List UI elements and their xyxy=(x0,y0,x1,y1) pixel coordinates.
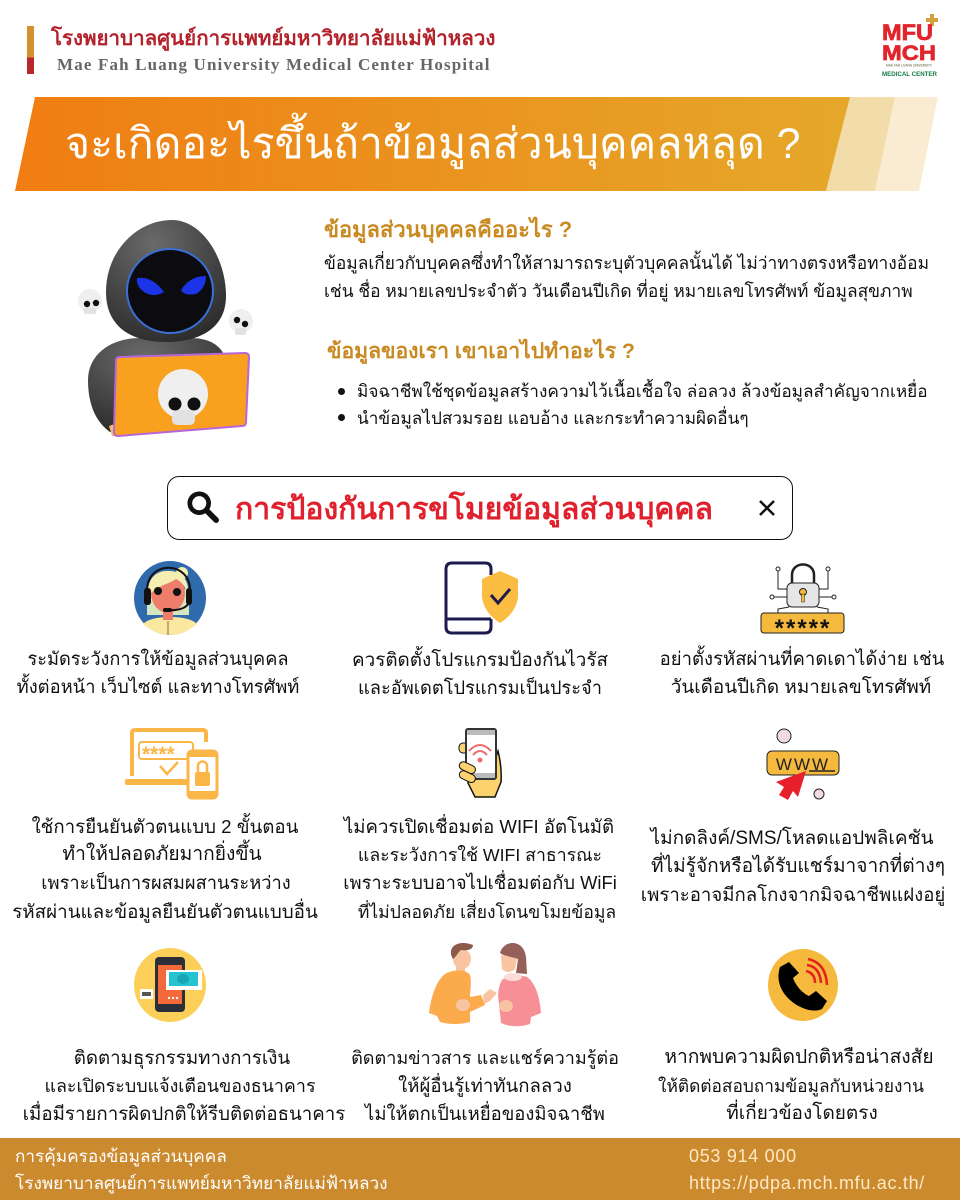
search bar xyxy=(167,476,793,540)
tip 8 text: ติดตามข่าวสาร และแชร์ความรู้ต่อ xyxy=(351,1048,619,1068)
tip 7 text xyxy=(23,1047,345,1124)
bullet list: นำข้อมูลไปสวมรอย แอบอ้าง และกระทำความผิดอื่นๆ xyxy=(357,408,749,428)
tip 8 text xyxy=(351,1048,619,1124)
search heading: การป้องกันการขโมยข้อมูลส่วนบุคคล xyxy=(235,493,713,526)
header accent bar xyxy=(27,26,34,74)
tip 1 text: ทั้งต่อหน้า เว็บไซต์ และทางโทรศัพท์ xyxy=(17,676,299,697)
tip 4 text: ทำให้ปลอดภัยมากยิ่งขึ้น xyxy=(62,844,262,865)
tip 3 text: อย่าตั้งรหัสผ่านที่คาดเดาได้ง่าย เช่น xyxy=(660,648,944,669)
tip 3 text xyxy=(660,645,944,697)
tip 9 text: หากพบความผิดปกติหรือน่าสงสัย xyxy=(664,1047,934,1068)
tip 6 icon: www click: WWW xyxy=(776,755,830,774)
tip 4 text: เพราะเป็นการผสมผสานระหว่าง xyxy=(41,872,291,893)
heading: what is personal data: ข้อมูลส่วนบุคคลคืออะไร ? xyxy=(324,217,572,242)
definition text: เช่น ชื่อ หมายเลขประจำตัว วันเดือนปีเกิด ที่อยู่ หมายเลขโทรศัพท์ ข้อมูลสุขภาพ xyxy=(324,281,913,301)
tip 5 icon: hand with phone wifi xyxy=(458,728,502,798)
tip 8 text: ไม่ให้ตกเป็นเหยื่อของมิจฉาชีพ xyxy=(365,1103,605,1124)
tip 7 text: ติดตามธุรกรรมทางการเงิน xyxy=(74,1047,290,1068)
tip 4 text: รหัสผ่านและข้อมูลยืนยันตัวตนแบบอื่น xyxy=(12,901,318,922)
hospital name English: Mae Fah Luang University Medical Center Hospital xyxy=(57,55,491,74)
definition text xyxy=(324,250,929,302)
bullet list: มิจฉาชีพใช้ชุดข้อมูลสร้างความไว้เนื้อเชื้อใจ ล่อลวง ล้วงข้อมูลสำคัญจากเหยื่อ xyxy=(357,381,928,401)
logo: MCH xyxy=(882,42,936,65)
tip 2 text: และอัพเดตโปรแกรมเป็นประจำ xyxy=(358,677,602,698)
tip 2 text: ควรติดตั้งโปรแกรมป้องกันไวรัส xyxy=(352,649,608,670)
tip 4 text xyxy=(12,813,318,923)
tip 2 text xyxy=(352,646,608,698)
tip 8 icon: two people talking xyxy=(429,943,541,1026)
hacker illustration xyxy=(78,220,253,437)
tip 1 text: ระมัดระวังการให้ข้อมูลส่วนบุคคล xyxy=(27,649,289,669)
tip 5 text: เพราะระบบอาจไปเชื่อมต่อกับ WiFi xyxy=(343,872,617,893)
tip 5 text: และระวังการใช้ WIFI สาธารณะ xyxy=(358,845,602,865)
bullet list xyxy=(338,378,928,428)
tip 3 icon: padlock and password xyxy=(760,563,844,642)
tip 9 text: ที่เกี่ยวข้องโดยตรง xyxy=(726,1103,878,1124)
footer organisation text xyxy=(15,1146,388,1194)
logo: MEDICAL CENTER xyxy=(882,71,937,78)
tip 7 text: และเปิดระบบแจ้งเตือนของธนาคาร xyxy=(44,1076,316,1096)
tip 6 text: เพราะอาจมีกลโกงจากมิจฉาชีพแฝงอยู่ xyxy=(641,884,945,905)
hospital name Thai: โรงพยาบาลศูนย์การแพทย์มหาวิทยาลัยแม่ฟ้าหลวง xyxy=(51,27,495,50)
heading: what they do with our data: ข้อมูลของเรา เขาเอาไปทำอะไร ? xyxy=(327,340,635,363)
tip 4 icon: laptop and phone lock xyxy=(125,728,218,800)
footer organisation text: โรงพยาบาลศูนย์การแพทย์มหาวิทยาลัยแม่ฟ้าหลวง xyxy=(15,1172,388,1192)
tip 5 text: ที่ไม่ปลอดภัย เสี่ยงโดนขโมยข้อมูล xyxy=(358,902,616,922)
footer organisation text: การคุ้มครองข้อมูลส่วนบุคคล xyxy=(15,1146,227,1166)
tip 4 text: ใช้การยืนยันตัวตนแบบ 2 ขั้นตอน xyxy=(32,816,298,837)
tip 1 text xyxy=(17,648,299,697)
tip 5 text xyxy=(342,814,617,922)
tip 6 text: ไม่กดลิงค์/SMS/โหลดแอปพลิเคชัน xyxy=(651,828,933,849)
tip 3 icon: padlock and password: ***** xyxy=(775,615,831,642)
footer contact text xyxy=(689,1146,925,1193)
icon: magnifier xyxy=(187,492,219,523)
icon: close xyxy=(759,500,775,516)
tip 8 text: ให้ผู้อื่นรู้เท่าทันกลลวง xyxy=(398,1075,572,1096)
tip 9 icon: phone call xyxy=(768,949,838,1021)
tip 3 text: วันเดือนปีเกิด หมายเลขโทรศัพท์ xyxy=(671,676,931,697)
tip 2 icon: phone with shield xyxy=(444,562,518,634)
logo: MAE FAH LUANG UNIVERSITY xyxy=(886,62,932,68)
tip 4 icon: laptop and phone lock: **** xyxy=(142,743,176,766)
logo: MFU xyxy=(882,20,933,45)
tip 7 text: เมื่อมีรายการผิดปกติให้รีบติดต่อธนาคาร xyxy=(23,1103,345,1124)
title: จะเกิดอะไรขึ้นถ้าข้อมูลส่วนบุคคลหลุด ? xyxy=(65,120,800,168)
tip 6 icon: www click xyxy=(766,728,840,800)
tip 6 text: ที่ไม่รู้จักหรือได้รับแชร์มาจากที่ต่างๆ xyxy=(651,856,945,877)
tip 1 icon: headset agent xyxy=(134,561,206,635)
title banner xyxy=(15,97,938,191)
footer contact text: 053 914 000 xyxy=(689,1146,797,1166)
tip 5 text: ไม่ควรเปิดเชื่อมต่อ WIFI อัตโนมัติ xyxy=(344,816,614,837)
logo xyxy=(882,14,938,78)
tip 9 text: ให้ติดต่อสอบถามข้อมูลกับหน่วยงาน xyxy=(658,1076,924,1096)
definition text: ข้อมูลเกี่ยวกับบุคคลซึ่งทำให้สามารถระบุตัวบุคคลนั้นได้ ไม่ว่าทางตรงหรือทางอ้อม xyxy=(324,253,929,273)
tip 6 text xyxy=(641,826,945,906)
tip 7 icon: banking phone xyxy=(134,948,206,1022)
footer xyxy=(0,1138,960,1200)
tip 9 text xyxy=(658,1047,934,1124)
footer contact text: https://pdpa.mch.mfu.ac.th/ xyxy=(689,1172,925,1192)
